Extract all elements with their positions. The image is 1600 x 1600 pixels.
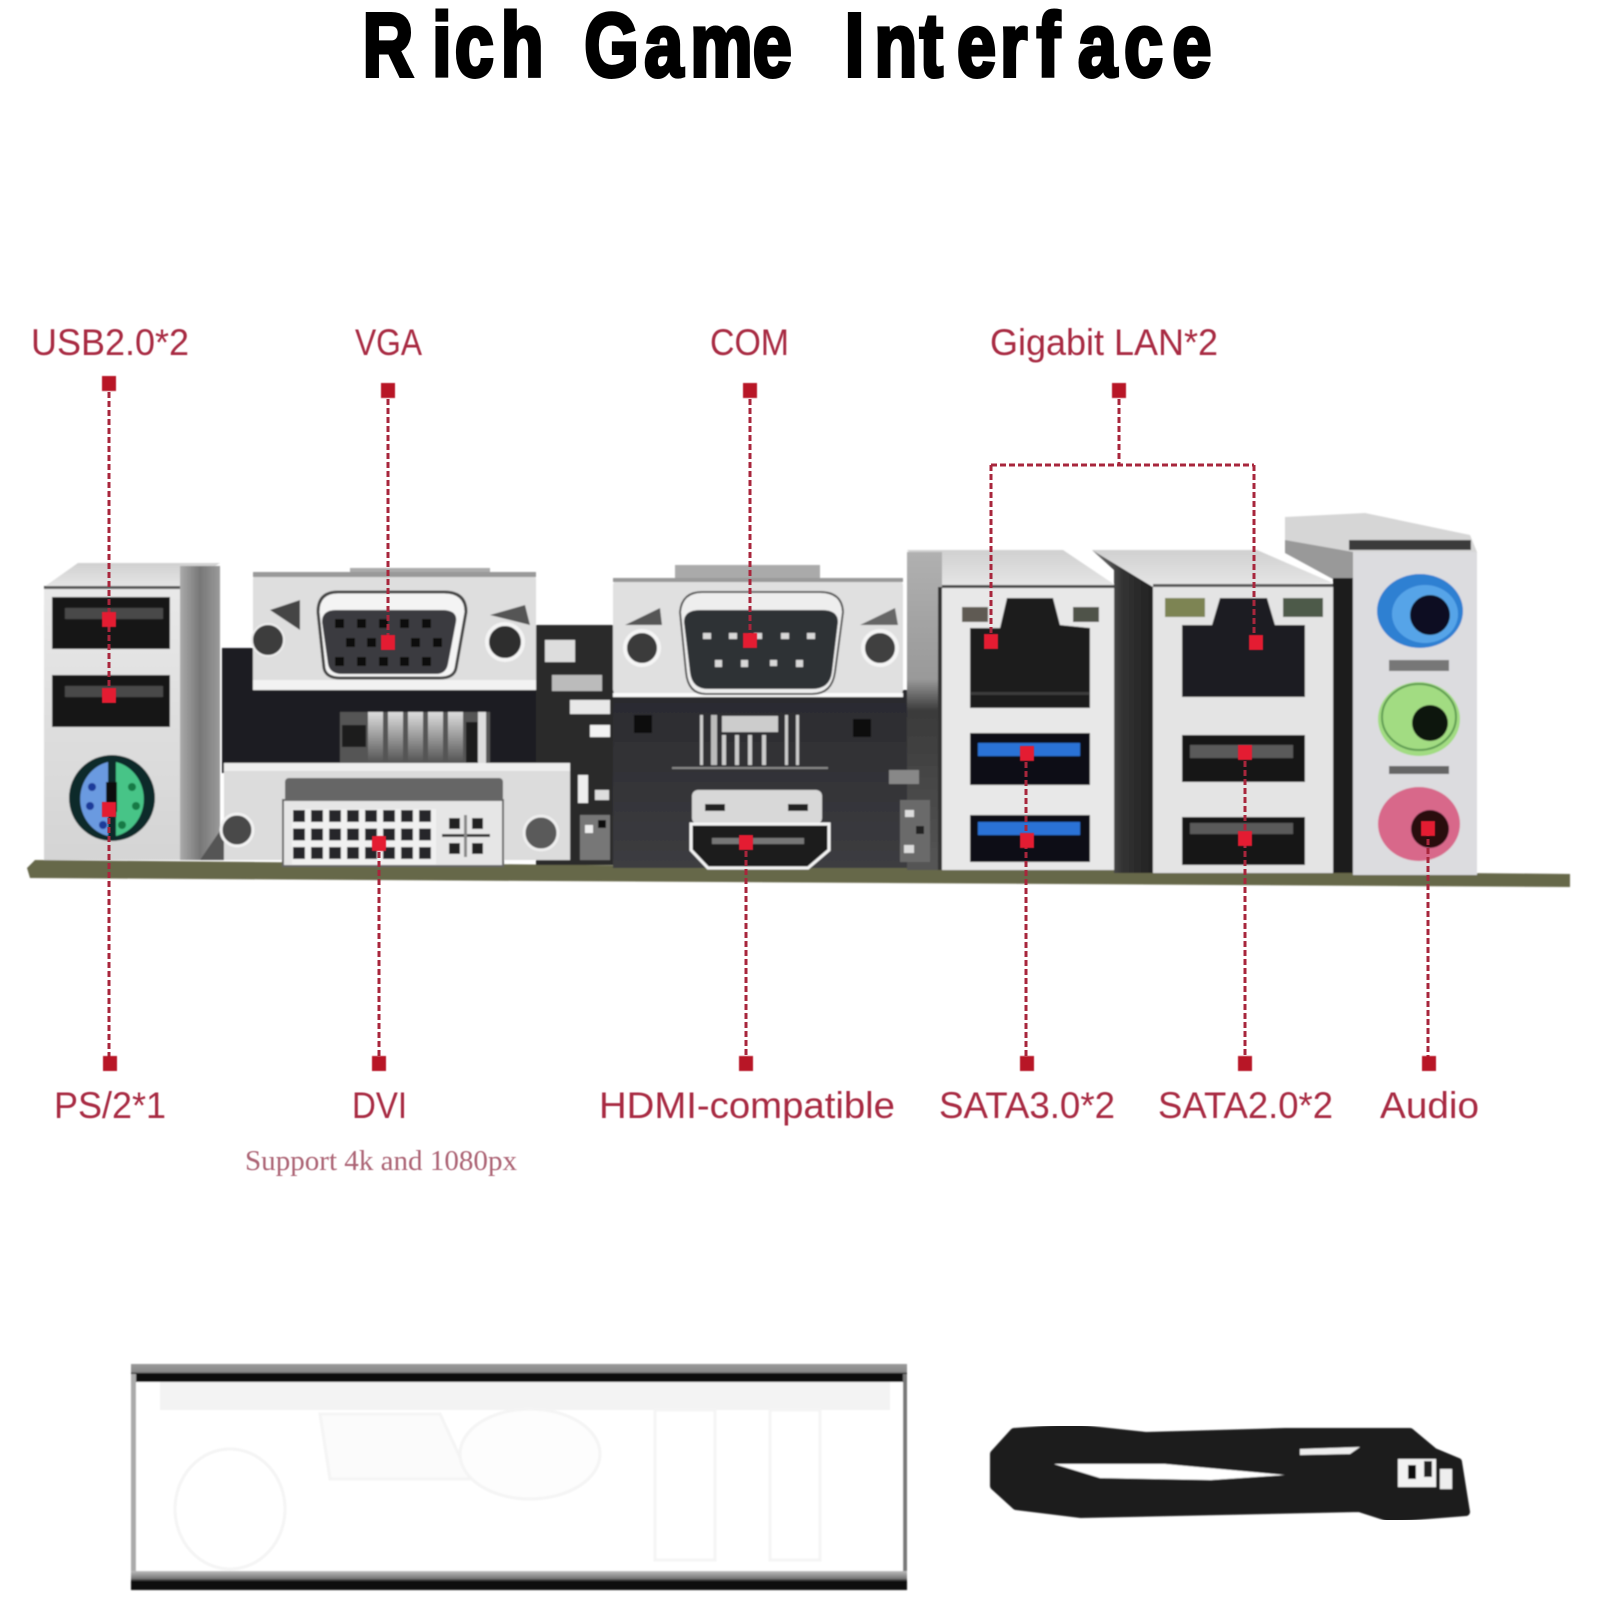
blue jack <box>1377 574 1463 648</box>
clutter beside the block <box>889 770 930 862</box>
label: COM: COM <box>710 322 789 363</box>
green jack <box>1378 682 1460 756</box>
PS/2 port <box>69 755 155 841</box>
USB3 port lower <box>970 815 1090 862</box>
label end markers <box>102 376 1436 1071</box>
USB3 port upper <box>970 733 1090 785</box>
COM and HDMI stack <box>613 565 909 868</box>
dark backing: middle clutter <box>536 625 616 865</box>
connector marker dots <box>102 612 1435 851</box>
top callout labels <box>31 322 1218 363</box>
shield top edge <box>131 1364 907 1382</box>
shield left edge <box>131 1374 136 1574</box>
HDMI port <box>691 790 829 868</box>
RJ45 port <box>962 598 1099 708</box>
cable bundle <box>994 1428 1466 1518</box>
USB port upper <box>52 597 170 649</box>
label: SATA2.0*2: SATA2.0*2 <box>1158 1085 1333 1126</box>
label: DVI: DVI <box>352 1085 407 1126</box>
COM heat fins <box>634 715 871 769</box>
VGA connector <box>252 568 536 690</box>
DVI right pin group <box>442 815 490 857</box>
note: support resolution: Support 4k and 1080px <box>245 1145 517 1177</box>
COM connector <box>613 565 903 697</box>
shield bottom edge <box>131 1571 907 1590</box>
slot <box>1389 660 1449 671</box>
circuit board edge <box>27 860 1570 887</box>
label: USB2.0*2: USB2.0*2 <box>31 322 189 363</box>
dotted leader lines <box>109 383 1428 1063</box>
gap in the cable loop <box>1054 1464 1285 1480</box>
label: HDMI-compatible: HDMI-compatible <box>599 1085 895 1126</box>
bottom callout labels <box>54 1085 1479 1177</box>
rear I/O panel photo <box>27 513 1570 887</box>
audio jack block <box>1285 513 1477 875</box>
USB port lower <box>52 675 170 727</box>
VGA heat fins <box>340 712 490 768</box>
SATA cable accessory <box>994 1428 1466 1518</box>
label: PS/2*1: PS/2*1 <box>54 1085 166 1126</box>
cable highlight <box>1300 1447 1360 1455</box>
LAN and SATA2 block <box>1092 550 1333 873</box>
slot <box>1389 766 1449 774</box>
USB port upper <box>1182 735 1305 782</box>
label: SATA3.0*2: SATA3.0*2 <box>939 1085 1115 1126</box>
label: Audio: Audio <box>1380 1085 1479 1126</box>
I/O shield accessory <box>131 1364 907 1590</box>
shield right edge <box>903 1374 907 1574</box>
faint shield cutouts <box>160 1380 890 1569</box>
LAN and USB3 block <box>889 550 1118 870</box>
dark backing: VGA and DVI stack <box>222 648 542 773</box>
USB and PS/2 block <box>44 563 220 860</box>
USB port lower <box>1182 817 1305 865</box>
label: VGA: VGA <box>355 322 422 363</box>
label: Gigabit LAN*2: Gigabit LAN*2 <box>990 322 1218 363</box>
DVI connector <box>200 763 570 866</box>
pink jack <box>1378 787 1460 861</box>
RJ45 port <box>1165 598 1323 697</box>
connector details <box>1398 1459 1452 1489</box>
